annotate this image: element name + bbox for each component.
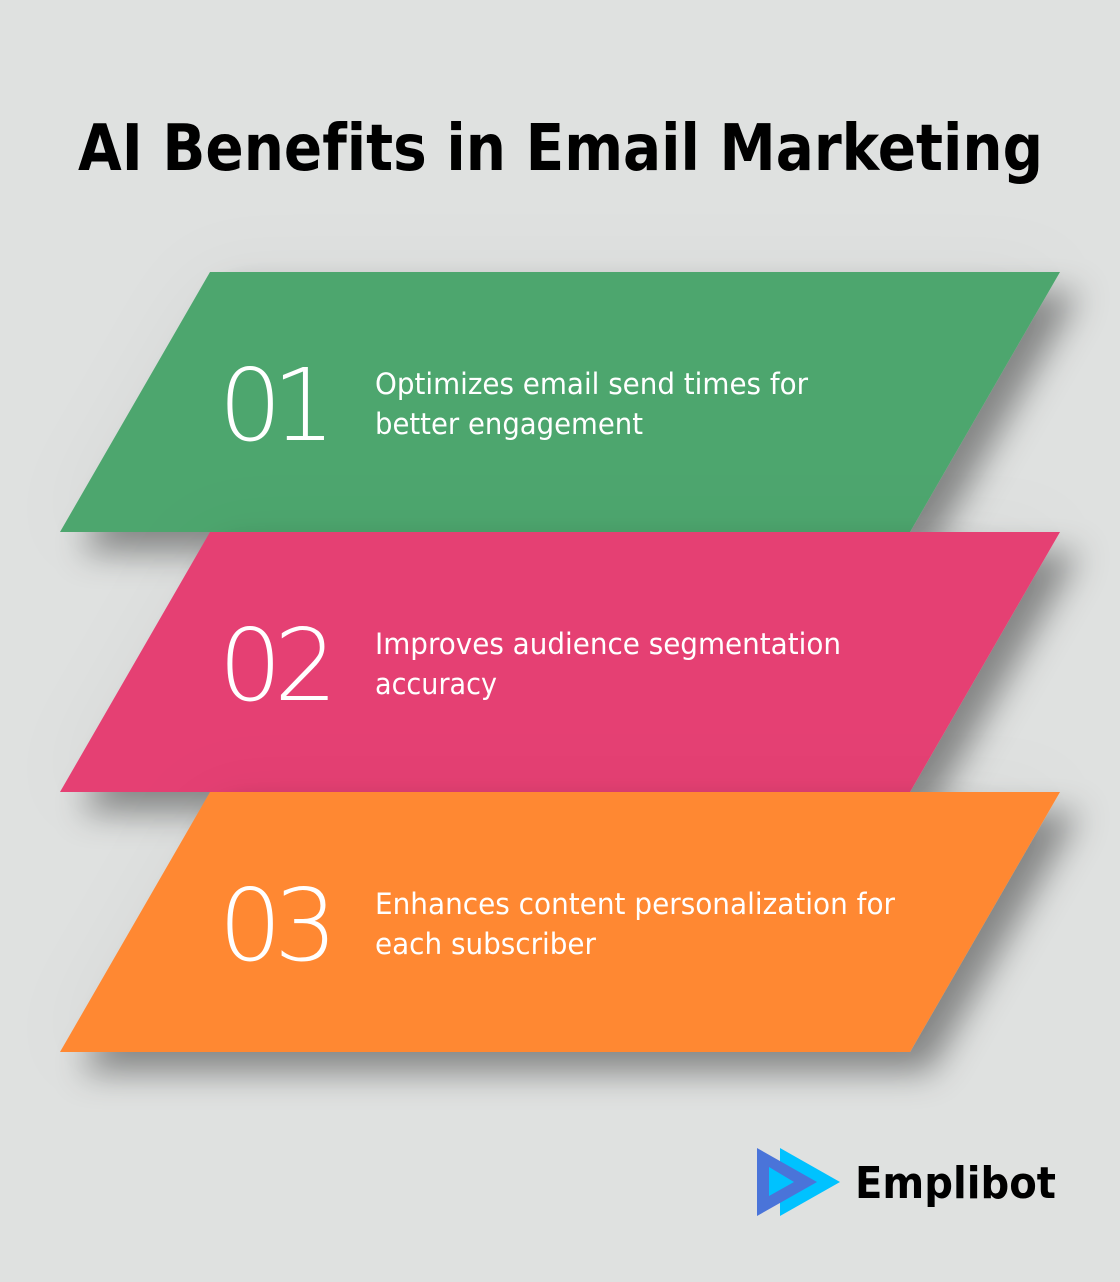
description 02: Improves audience segmentation xyxy=(375,627,841,661)
description 01: better engagement xyxy=(375,407,643,441)
number 02: 02 xyxy=(218,607,338,724)
number 03: 03 xyxy=(218,867,338,984)
description 01: Optimizes email send times for xyxy=(375,367,808,401)
green parallelogram xyxy=(60,272,1060,532)
logo: Emplibot xyxy=(757,1148,1056,1216)
description 03: Enhances content personalization for xyxy=(375,887,895,921)
panel: step 01 xyxy=(60,272,1060,532)
icon: play triangles xyxy=(757,1148,840,1216)
description 02: accuracy xyxy=(375,667,497,701)
wordmark: Emplibot xyxy=(855,1158,1056,1209)
panel: step 03 xyxy=(60,792,1060,1052)
pink parallelogram xyxy=(60,532,1060,792)
orange parallelogram xyxy=(60,792,1060,1052)
number 01: 01 xyxy=(218,347,336,464)
description 03: each subscriber xyxy=(375,927,596,961)
panel: step 02 xyxy=(60,532,1060,792)
